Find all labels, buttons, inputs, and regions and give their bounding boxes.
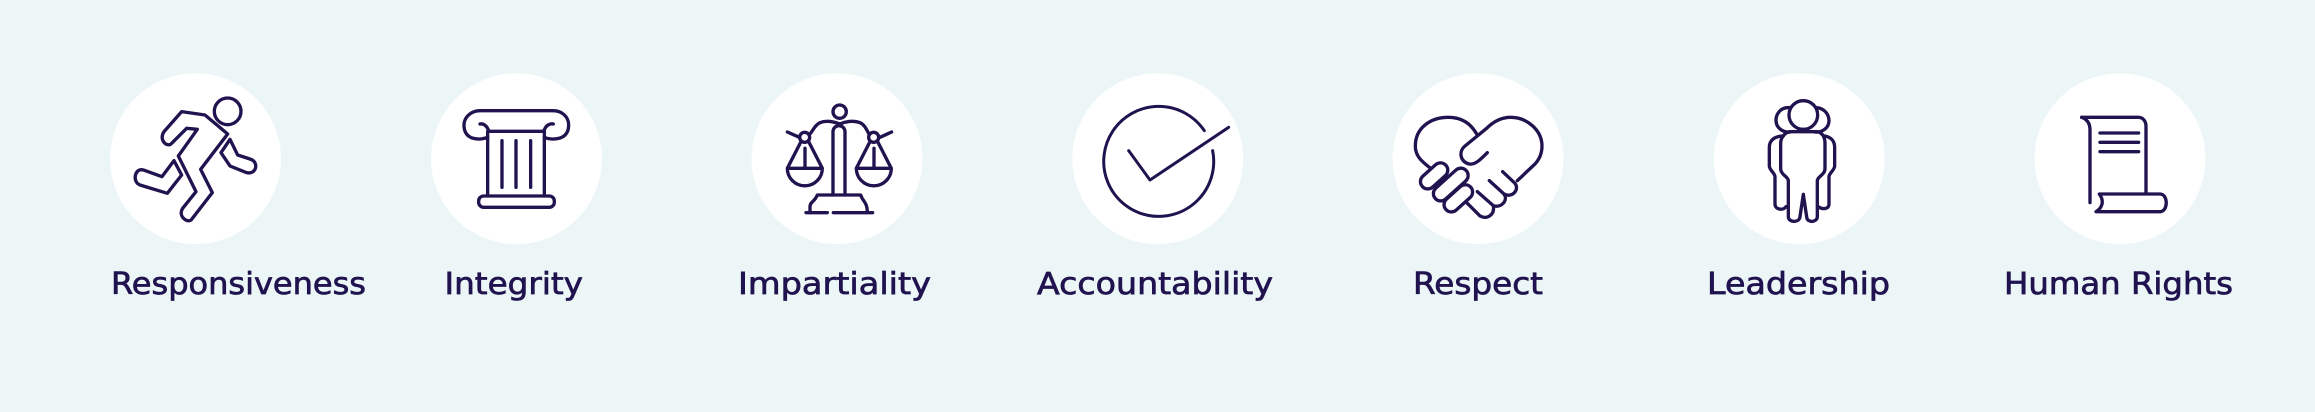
white circle <box>2034 73 2206 244</box>
icon: handshake heart <box>1415 117 1542 217</box>
label: Human Rights <box>2004 267 2233 302</box>
panel: Leadership <box>1707 73 1890 302</box>
white circle <box>1392 73 1564 244</box>
panel: Integrity <box>431 73 602 302</box>
icon: group of people <box>1769 101 1835 221</box>
label: Integrity <box>444 267 583 302</box>
icon: scales <box>787 105 892 213</box>
label: Respect <box>1413 267 1543 302</box>
icon: scroll <box>2082 117 2166 212</box>
label: Responsiveness <box>111 267 366 302</box>
label: Leadership <box>1707 267 1890 302</box>
label: Impartiality <box>738 267 931 302</box>
white circle <box>1714 73 1885 244</box>
icon: check mark in circle <box>1104 106 1229 216</box>
panel: Human Rights <box>2004 73 2233 302</box>
panel: Accountability <box>1037 73 1273 302</box>
icon: running person <box>135 98 256 221</box>
label: Accountability <box>1037 267 1273 302</box>
white circle <box>1072 73 1243 244</box>
panel: Responsiveness <box>110 73 366 302</box>
white circle <box>110 73 281 244</box>
white circle <box>752 73 922 244</box>
icon: column <box>464 111 569 207</box>
panel: Impartiality <box>738 73 931 302</box>
panel: Respect <box>1392 73 1564 302</box>
white circle <box>431 73 602 244</box>
